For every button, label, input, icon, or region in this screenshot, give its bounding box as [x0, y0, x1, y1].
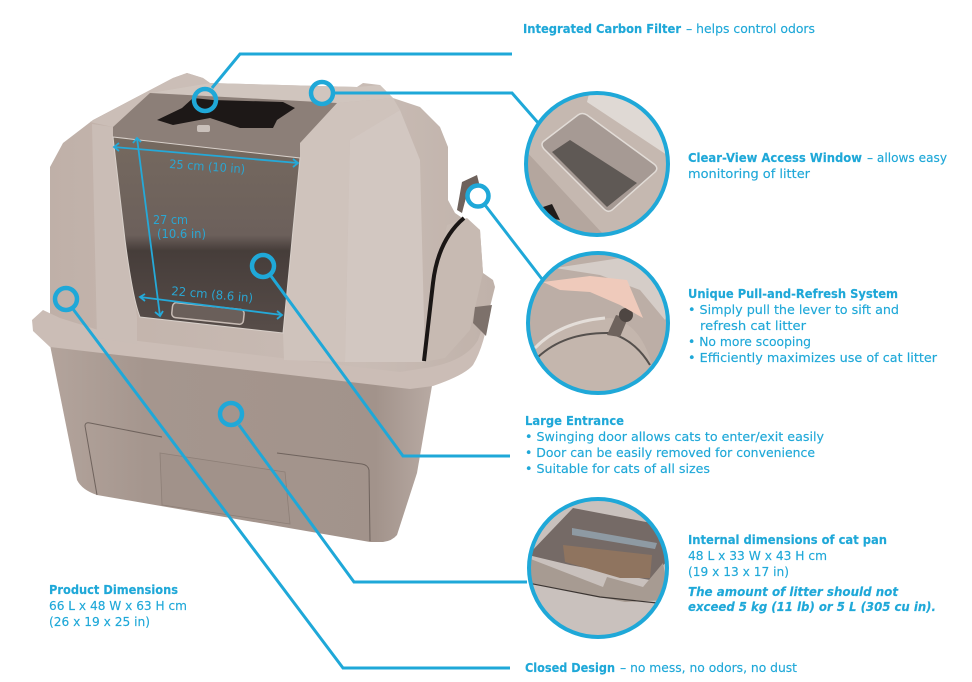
top width arrow — [114, 143, 298, 167]
product: litter box — [32, 73, 495, 542]
text: pull-and-refresh system — [688, 287, 937, 365]
rim — [32, 307, 490, 389]
text: large entrance: • Door can be easily removed for convenience — [525, 446, 815, 460]
dimension labels: 25 cm (10 in) — [169, 157, 246, 176]
callout lines — [73, 54, 545, 668]
closed design leader — [239, 425, 527, 582]
text: large entrance: • Suitable for cats of all sizes — [525, 462, 710, 476]
text: large entrance: • Swinging door allows cats to enter/exit easily — [525, 430, 824, 444]
text: product dimensions: Product Dimensions — [49, 583, 178, 597]
text: clear-view access window: – allows easy — [867, 151, 947, 165]
carbon filter leader — [212, 54, 512, 88]
text: large entrance — [525, 414, 824, 476]
text: internal dimensions: 48 L x 33 W x 43 H cm — [688, 549, 827, 563]
text: closed design — [525, 661, 797, 675]
hood shell — [50, 73, 495, 385]
text: clear-view access window: Clear-View Access Window — [688, 151, 862, 165]
bottom width arrow — [140, 294, 282, 319]
lower tub — [50, 345, 433, 542]
text: internal dimensions — [688, 533, 936, 614]
right side highlight — [345, 110, 425, 362]
text: large entrance: Large Entrance — [525, 414, 624, 428]
text: internal dimensions: (19 x 13 x 17 in) — [688, 565, 789, 579]
inset: access window — [520, 90, 675, 240]
dimension labels — [153, 157, 254, 305]
entrance leader — [271, 276, 510, 456]
left pillar panel — [92, 124, 137, 344]
text: pull-and-refresh system: • No more scooping — [688, 335, 811, 349]
right pillar panel — [283, 98, 400, 362]
side door seal — [424, 218, 464, 361]
text: product dimensions: (26 x 19 x 25 in) — [49, 615, 150, 629]
pull system leader — [485, 205, 545, 283]
text: pull-and-refresh system: • Efficiently maximizes use of cat litter — [688, 351, 937, 365]
inset: cat pan — [527, 497, 669, 639]
carbon filter — [157, 98, 295, 128]
text: internal dimensions: The amount of litter should not — [688, 585, 899, 599]
text: pull-and-refresh system: Unique Pull-and-Refresh System — [688, 287, 898, 301]
text: integrated carbon filter: – helps control odors — [686, 22, 815, 36]
dimension arrows on window — [114, 138, 298, 319]
side door — [423, 218, 483, 362]
window leader — [332, 93, 540, 125]
top panel — [113, 93, 337, 158]
text: internal dimensions: Internal dimensions of cat pan — [688, 533, 887, 547]
lever — [457, 175, 480, 213]
text: pull-and-refresh system: • Simply pull the lever to sift and — [688, 303, 899, 317]
drawer outline — [85, 423, 370, 541]
drawer handle recess — [160, 453, 290, 524]
text: internal dimensions: exceed 5 kg (11 lb) or 5 L (305 cu in). — [688, 600, 936, 614]
dimension labels: 27 cm — [153, 213, 188, 227]
text: pull-and-refresh system: refresh cat litter — [700, 319, 806, 333]
text: product dimensions — [49, 583, 187, 629]
side clip — [473, 305, 492, 336]
top band — [150, 83, 393, 103]
left ridge — [90, 73, 210, 127]
dimension labels: (10.6 in) — [157, 227, 206, 241]
text: clear-view access window — [688, 151, 947, 181]
product leader — [73, 309, 510, 668]
text: integrated carbon filter: Integrated Carbon Filter — [523, 22, 681, 36]
text: closed design: Closed Design — [525, 661, 615, 675]
window handle — [171, 302, 245, 325]
logo mark — [197, 125, 210, 132]
text: integrated carbon filter — [523, 22, 815, 36]
callout rings — [55, 82, 488, 425]
inset: pull lever — [525, 250, 675, 400]
text: closed design: – no mess, no odors, no dust — [620, 661, 797, 675]
text: clear-view access window: monitoring of litter — [688, 167, 810, 181]
text: product dimensions: 66 L x 48 W x 63 H cm — [49, 599, 187, 613]
dimension labels: 22 cm (8.6 in) — [171, 284, 254, 305]
window — [113, 137, 300, 333]
height arrow — [133, 138, 163, 316]
